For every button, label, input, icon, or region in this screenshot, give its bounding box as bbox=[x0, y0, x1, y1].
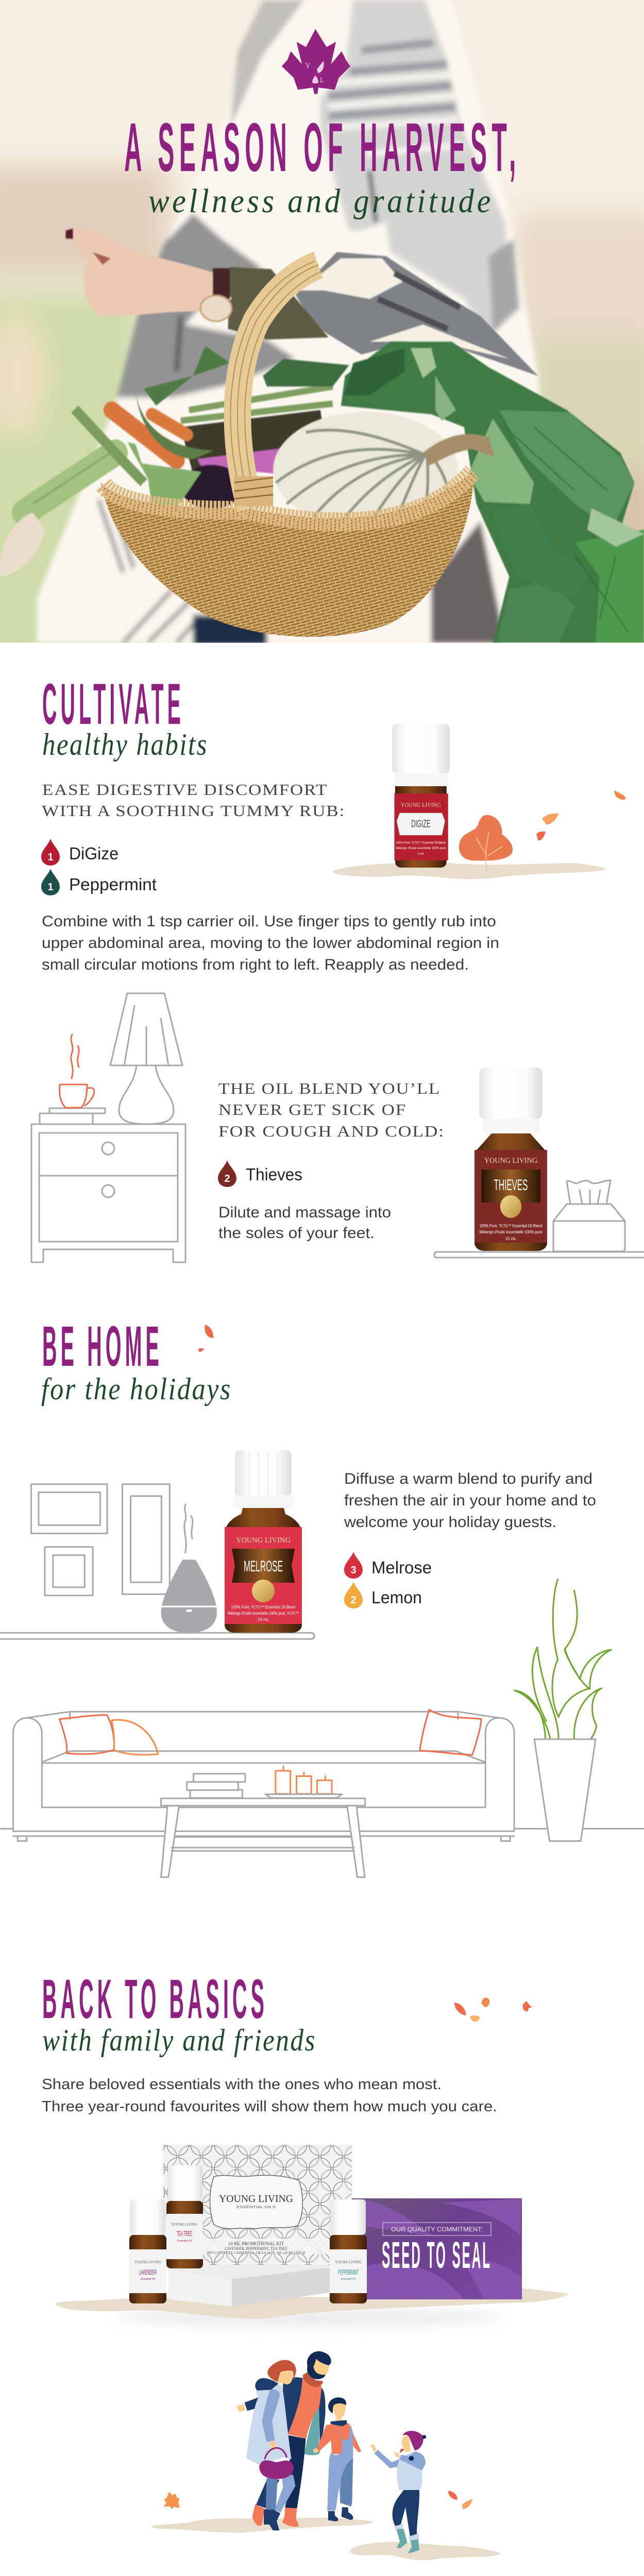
wall frames bbox=[31, 1484, 170, 1596]
logo: maple leaf with YL mark: L bbox=[320, 76, 325, 84]
title bbox=[124, 109, 521, 220]
bottle: digize: YOUNG LIVING bbox=[401, 802, 441, 808]
bottle: peppermint: PEPPERMINT bbox=[338, 2268, 359, 2276]
promotional kit box: 10 ML PROMOTIONAL KIT bbox=[228, 2241, 284, 2246]
promotional kit box: NET CONTENTS: 3 ESSENTIAL OILS 0.34 FL. OZ. (10 ML) EACH bbox=[207, 2250, 306, 2255]
bottle: tea tree: YOUNG LIVING bbox=[171, 2223, 198, 2227]
heading: back to basics with family and friends bbox=[42, 1968, 316, 2057]
bottle: tea tree bbox=[166, 2165, 203, 2268]
bottle: digize: DIGIZE bbox=[411, 818, 431, 830]
icon: drop 1 peppermint: 1 bbox=[47, 882, 54, 893]
illustration: family walking bbox=[151, 2351, 501, 2560]
text: share beloved essentials: Share beloved essentials with the ones who mean most. bbox=[42, 2076, 442, 2093]
icon: drop 1 peppermint bbox=[41, 869, 60, 895]
bottle: digize: 100% Pure, YLTG™ Essential Oil Blend bbox=[396, 841, 446, 845]
shelf with tissue box bbox=[434, 1180, 644, 1258]
illustration: wall frames, diffuser and shelf bbox=[0, 1484, 314, 1639]
bottle: digize: Mélange d'huile essentielle 100% pure bbox=[396, 846, 446, 850]
promotional kit box: LAVENDER, PEPPERMINT, TEA TREE bbox=[225, 2246, 287, 2251]
girl bbox=[370, 2431, 426, 2554]
seed to seal card: OUR QUALITY COMMITMENT: bbox=[391, 2226, 483, 2233]
hero photo: woman holding harvest basket bbox=[0, 0, 644, 666]
shawl body bbox=[37, 0, 558, 645]
subtitle: wellness and gratitude bbox=[148, 182, 494, 220]
icon: drop 3 melrose: 3 bbox=[350, 1565, 357, 1576]
subheading: thieves blend: NEVER GET SICK OF bbox=[218, 1100, 406, 1118]
icon: maple leaf bbox=[163, 2492, 180, 2509]
subheading: tummy rub: WITH A SOOTHING TUMMY RUB: bbox=[42, 802, 345, 820]
illustration: ground, bush and leaves bbox=[333, 790, 626, 879]
illustration: nightstand, lamp, cup bbox=[31, 993, 185, 1262]
bottle: lavender: YOUNG LIVING bbox=[134, 2260, 161, 2264]
heading: back to basics with family and friends: with family and friends bbox=[42, 2023, 316, 2057]
text: diffuse a warm blend bbox=[344, 1470, 596, 1531]
bottle: thieves: YOUNG LIVING bbox=[484, 1157, 538, 1165]
candles bbox=[265, 1766, 342, 1798]
text: thieves directions: Dilute and massage into bbox=[218, 1204, 391, 1221]
boy bbox=[313, 2397, 361, 2521]
bottle: melrose: YOUNG LIVING bbox=[236, 1536, 291, 1545]
coffee cup with steam bbox=[59, 1035, 94, 1108]
cushions bbox=[60, 1709, 481, 1755]
bottle: melrose: 100% Pure, YLTG™ Essential Oil Blend bbox=[231, 1605, 296, 1609]
tissue box bbox=[553, 1180, 625, 1251]
bottle: melrose: Mélange d'huile essentielle 100% pure, YLTG™ bbox=[228, 1611, 299, 1616]
bottle: thieves: 100% Pure, YLTG™ Essential Oil Blend bbox=[479, 1224, 543, 1228]
text: diffuse a warm blend: welcome your holiday guests. bbox=[344, 1514, 556, 1531]
father bbox=[236, 2351, 331, 2527]
icon: drop 3 melrose bbox=[344, 1552, 363, 1579]
text: thieves directions bbox=[218, 1204, 391, 1242]
books on table bbox=[187, 1774, 245, 1798]
white base block bbox=[168, 2265, 336, 2307]
text: thieves directions: the soles of your feet. bbox=[218, 1225, 375, 1242]
ingredient list: melrose, lemon: Melrose bbox=[371, 1558, 432, 1577]
leaves near girl bbox=[448, 2491, 472, 2509]
ingredient list: digize, peppermint: Peppermint bbox=[69, 875, 157, 894]
blurred garden background bbox=[0, 0, 644, 666]
paragraph: tummy rub directions: Combine with 1 tsp carrier oil. Use finger tips to gently rub into bbox=[42, 913, 496, 930]
bottle: thieves: THIEVES bbox=[494, 1177, 528, 1194]
icon: drop 2 lemon bbox=[344, 1582, 363, 1608]
wicker basket bbox=[100, 261, 474, 637]
leaves near back to basics bbox=[454, 1997, 532, 2022]
bottle: thieves: Mélange d'huile essentielle 100% pure bbox=[479, 1230, 543, 1234]
floor line bbox=[1, 1828, 644, 1829]
text: share beloved essentials: Three year-round favourites will show them how much you care. bbox=[42, 2098, 497, 2115]
bottle: lavender bbox=[129, 2199, 166, 2303]
potted plant bbox=[514, 1580, 611, 1841]
ground bbox=[56, 2287, 569, 2319]
ingredient list: digize, peppermint: DiGize bbox=[69, 844, 118, 863]
icon: drop 2 thieves bbox=[218, 1160, 236, 1187]
bottle: digize: 5 ml bbox=[418, 852, 423, 856]
diffuser bbox=[161, 1504, 217, 1633]
vegetables inside basket bbox=[0, 346, 349, 578]
icon: drop 2 thieves: 2 bbox=[224, 1173, 230, 1184]
icon: drop 1 digize: 1 bbox=[47, 852, 54, 863]
arm and hand with watch bbox=[66, 228, 329, 340]
ground patches bbox=[151, 2518, 501, 2560]
paragraph: tummy rub directions bbox=[42, 913, 499, 973]
illustration: sofa, coffee table and plant bbox=[1, 1580, 644, 1877]
logo: maple leaf with YL mark bbox=[282, 29, 350, 94]
subheading: tummy rub bbox=[42, 781, 345, 820]
text: diffuse a warm blend: Diffuse a warm blend to purify and bbox=[344, 1470, 592, 1487]
bottle: lavender: Essential Oil bbox=[141, 2278, 155, 2281]
bottle: peppermint: YOUNG LIVING bbox=[335, 2260, 362, 2264]
bottle: tea tree: TEA TREE bbox=[177, 2229, 192, 2238]
bottle: tea tree: Essential Oil bbox=[177, 2240, 192, 2243]
bottle: thieves bbox=[474, 1067, 547, 1251]
icon: drop 2 lemon: 2 bbox=[350, 1595, 357, 1606]
ingredient list: digize, peppermint bbox=[41, 839, 157, 895]
promotional kit box: ESSENTIAL OILS bbox=[236, 2206, 276, 2209]
icon: drop 1 digize bbox=[41, 839, 60, 866]
subheading: thieves blend bbox=[218, 1079, 445, 1140]
books bbox=[40, 1108, 105, 1124]
ingredient list: melrose, lemon: Lemon bbox=[371, 1588, 422, 1607]
heading: cultivate healthy habits bbox=[42, 672, 208, 761]
text: diffuse a warm blend: freshen the air in your home and to bbox=[344, 1492, 596, 1509]
subheading: tummy rub: EASE DIGESTIVE DISCOMFORT bbox=[42, 781, 328, 799]
bottle: thieves: 15 mL bbox=[505, 1236, 517, 1241]
leafy greens bbox=[341, 342, 644, 643]
promotional kit box: YOUNG LIVING bbox=[219, 2193, 293, 2205]
text: share beloved essentials bbox=[42, 2076, 497, 2115]
bottle: melrose: MELROSE bbox=[244, 1558, 283, 1575]
subheading: thieves blend: THE OIL BLEND YOU’LL bbox=[218, 1079, 440, 1097]
bottle: digize bbox=[392, 724, 450, 868]
coffee table bbox=[161, 1799, 365, 1877]
logo: maple leaf with YL mark: Y bbox=[305, 62, 311, 70]
heading: be home for the holidays: BE HOME bbox=[42, 1315, 163, 1378]
ingredient: thieves: Thieves bbox=[246, 1165, 302, 1184]
striped pumpkin bbox=[273, 412, 495, 528]
heading: be home for the holidays: for the holidays bbox=[41, 1372, 232, 1406]
bottle: melrose: 15 mL bbox=[258, 1617, 269, 1622]
seed to seal card bbox=[352, 2198, 522, 2299]
ingredient list: melrose, lemon bbox=[344, 1552, 432, 1608]
bottle: melrose bbox=[225, 1450, 302, 1633]
nightstand bbox=[31, 1124, 185, 1262]
bottle: peppermint bbox=[330, 2199, 367, 2303]
ground shadow bbox=[113, 2308, 505, 2327]
heading: cultivate healthy habits: healthy habits bbox=[42, 727, 208, 761]
bottle: lavender: LAVENDER bbox=[139, 2268, 157, 2276]
ingredient: thieves bbox=[218, 1160, 302, 1187]
heading: be home for the holidays bbox=[41, 1315, 232, 1406]
mother bbox=[246, 2360, 296, 2531]
sofa bbox=[13, 1711, 514, 1841]
text: CULTIVATE bbox=[42, 672, 184, 736]
bottle: peppermint: Essential Oil bbox=[341, 2278, 355, 2281]
paragraph: tummy rub directions: small circular motions from right to left. Reapply as needed. bbox=[42, 956, 469, 973]
leaves near heading bbox=[198, 1325, 213, 1352]
knitted shawl fold over arm bbox=[296, 252, 538, 376]
text: BACK TO BASICS bbox=[42, 1968, 268, 2030]
subheading: thieves blend: FOR COUGH AND COLD: bbox=[218, 1122, 445, 1140]
paragraph: tummy rub directions: upper abdominal area, moving to the lower abdominal region in bbox=[42, 935, 499, 952]
shelf bbox=[0, 1633, 314, 1639]
lamp bbox=[110, 993, 182, 1124]
promotional kit box bbox=[163, 2145, 352, 2265]
product group: gift kit bbox=[56, 2145, 569, 2327]
